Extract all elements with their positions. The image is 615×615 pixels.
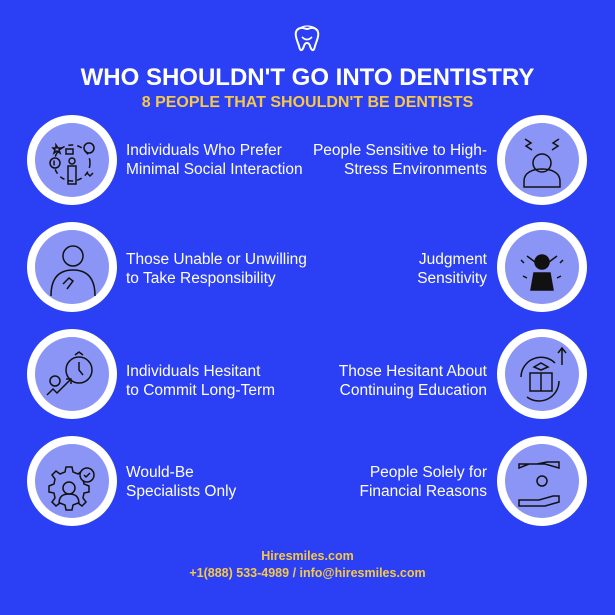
item 5 text (126, 363, 275, 399)
item 2 text: Stress Environments (344, 161, 487, 178)
item 2 icon: stress (497, 115, 587, 205)
item 6 text: Continuing Education (340, 382, 487, 399)
item 1 text (126, 142, 303, 178)
item 4 icon: judgment (497, 222, 587, 312)
item 3 icon: responsibility (27, 222, 117, 312)
item 1 text: Minimal Social Interaction (126, 161, 303, 178)
item 3 text (126, 251, 307, 287)
item 8 text: Financial Reasons (359, 483, 487, 500)
item 7 icon: specialist (27, 436, 117, 526)
item 6 text: Those Hesitant About (339, 363, 487, 380)
item 4 text (417, 251, 487, 287)
item 3 text: to Take Responsibility (126, 270, 276, 287)
item 5 text: to Commit Long-Term (126, 382, 275, 399)
item 8 text (359, 464, 487, 500)
item 8 text: People Solely for (370, 464, 487, 481)
item 4 text: Sensitivity (417, 270, 487, 287)
logo: tooth (294, 25, 320, 52)
item 7 text: Specialists Only (126, 483, 236, 500)
subtitle: 8 PEOPLE THAT SHOULDN'T BE DENTISTS (142, 94, 473, 111)
item 5 icon: long-term commitment (27, 329, 117, 419)
item 7 text (126, 464, 236, 500)
item 2 text (313, 142, 487, 178)
item 1 icon: social (27, 115, 117, 205)
item 1 text: Individuals Who Prefer (126, 142, 282, 159)
footer contact: Hiresmiles.com (261, 549, 354, 563)
footer contact (189, 549, 426, 580)
item 7 text: Would-Be (126, 464, 194, 481)
item 4 text: Judgment (419, 251, 487, 268)
item 5 text: Individuals Hesitant (126, 363, 260, 380)
item 6 icon: education (497, 329, 587, 419)
item 3 text: Those Unable or Unwilling (126, 251, 307, 268)
item 2 text: People Sensitive to High- (313, 142, 487, 159)
item 6 text (339, 363, 487, 399)
title: WHO SHOULDN'T GO INTO DENTISTRY (81, 64, 534, 91)
footer contact: +1(888) 533-4989 / info@hiresmiles.com (189, 566, 426, 580)
item 8 icon: money hands (497, 436, 587, 526)
